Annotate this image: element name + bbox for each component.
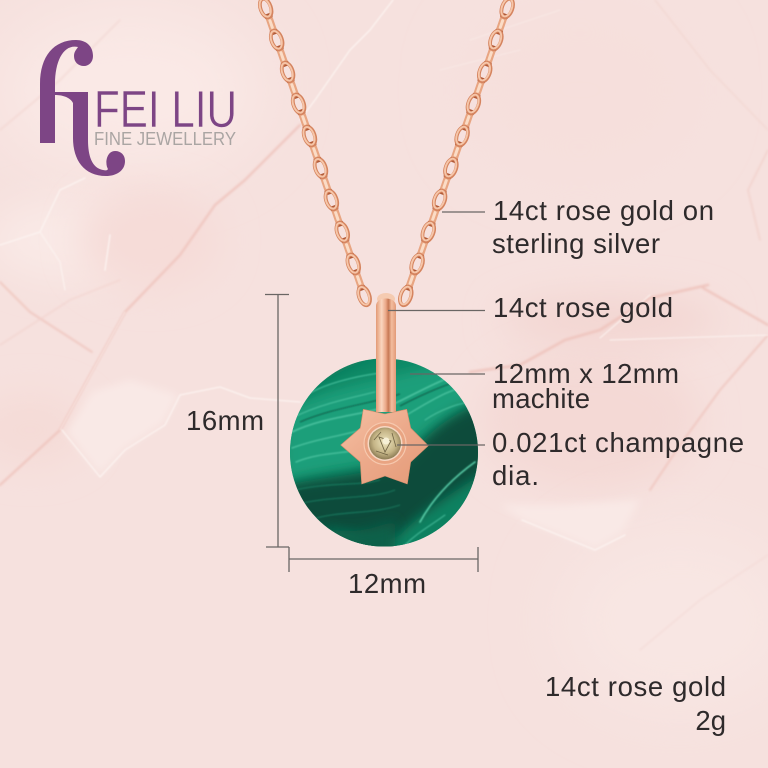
bezel	[364, 422, 406, 464]
right chain strand	[398, 0, 515, 307]
necklace chain	[257, 0, 515, 307]
label: diamond	[492, 427, 744, 491]
light marble patches	[66, 380, 640, 548]
label: diamond: dia.	[492, 460, 539, 491]
label: stone: machite	[492, 383, 590, 414]
logo tagline: FINE JEWELLERY: FINE JEWELLERY	[94, 128, 236, 149]
callout lines	[388, 212, 485, 445]
logo: Fei Liu Fine Jewellery	[40, 40, 237, 176]
label: chain material: sterling silver	[492, 228, 660, 259]
label: diamond: 0.021ct champagne	[492, 427, 744, 458]
summary: metal and weight: 2g	[695, 705, 726, 736]
malachite disc	[290, 358, 478, 546]
label: chain material	[492, 195, 714, 259]
label: stone	[492, 358, 679, 414]
summary: metal and weight: 14ct rose gold	[545, 671, 726, 702]
pendant	[290, 293, 478, 546]
label: chain material: 14ct rose gold on	[493, 195, 714, 226]
bail	[376, 293, 396, 412]
left chain strand	[257, 0, 372, 307]
height label: 16mm	[186, 405, 264, 436]
label: stone: 12mm x 12mm	[493, 358, 679, 389]
summary: metal and weight	[545, 671, 726, 736]
logo monogram	[40, 40, 125, 176]
label: bail material: 14ct rose gold	[493, 292, 673, 323]
white veins	[0, 0, 768, 550]
star setting	[341, 409, 428, 484]
logo wordmark: FEI LIU: FEI LIU	[94, 81, 237, 139]
height bracket	[265, 294, 289, 547]
champagne diamond	[369, 428, 401, 460]
width label: 12mm	[348, 568, 426, 599]
width bracket	[289, 547, 478, 572]
